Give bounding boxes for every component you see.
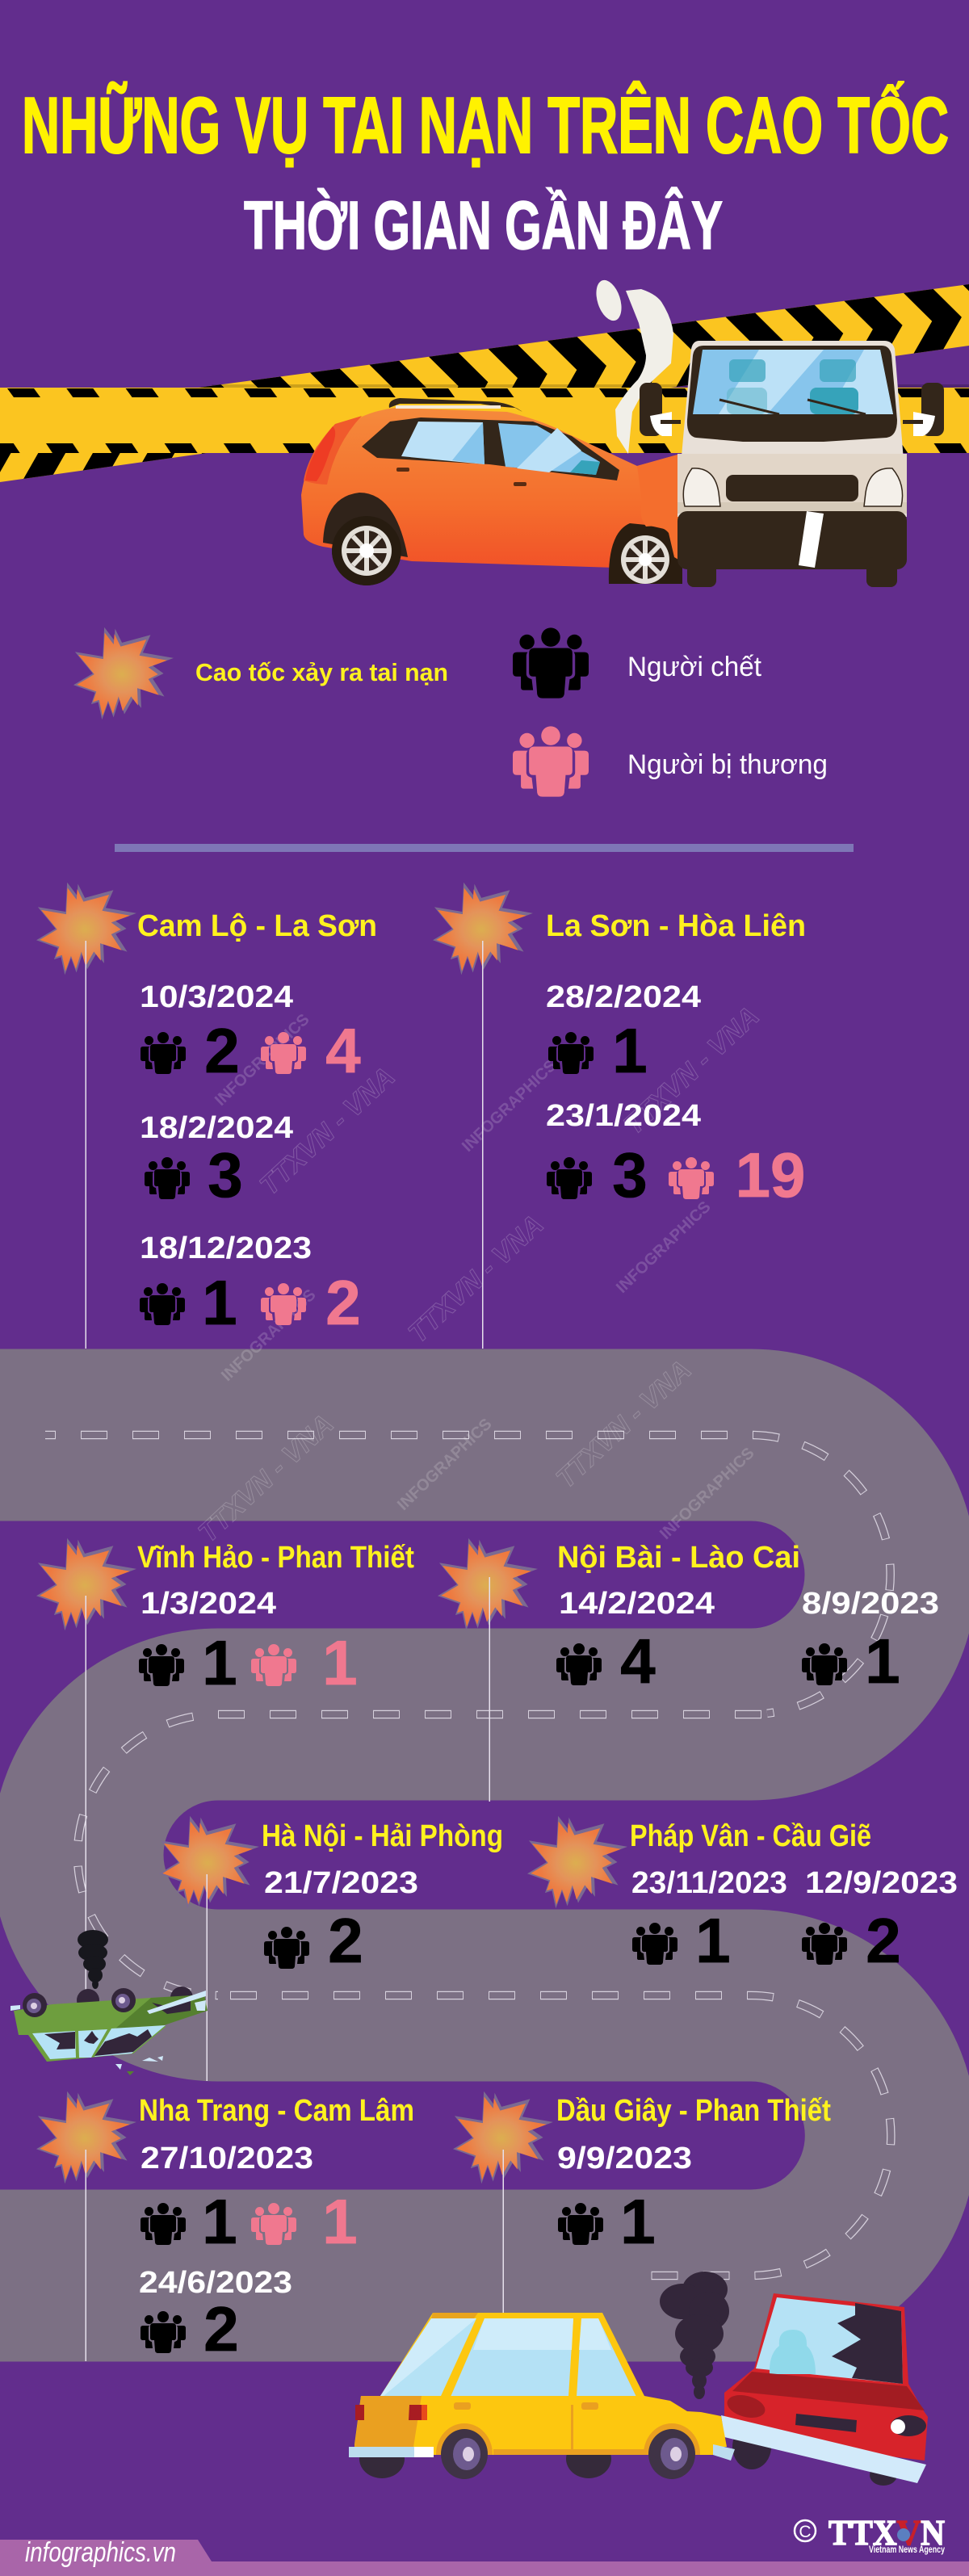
panel: Cam Lộ - La Sơn [36, 883, 377, 1349]
record: 24/6/2023: 2 [203, 2293, 239, 2364]
record: 18/2/2024: 3 [208, 1139, 243, 1210]
watermarks: INFOGRAPHICS [459, 1057, 560, 1156]
heading: Pháp Vân - Cầu Giẽ: Pháp Vân - Cầu Giẽ [630, 1819, 871, 1853]
record: 1/3/2024: 1/3/2024 [141, 1587, 276, 1621]
icon: black smoke [78, 1930, 108, 1989]
logo: TTXVN: C [799, 2523, 812, 2541]
record: 10/3/2024: 2 [204, 1015, 240, 1086]
footer source text: infographics.vn [25, 2537, 176, 2568]
record: 21/7/2023: 2 [328, 1905, 363, 1976]
record: 9/9/2023: 9/9/2023 [557, 2142, 692, 2175]
record: 12/9/2023: 12/9/2023 [805, 1866, 958, 1900]
watermarks: INFOGRAPHICS [218, 1286, 320, 1385]
record: 14/2/2024: 4 [620, 1626, 656, 1697]
winding road [0, 1435, 891, 2276]
record: 1/3/2024 [139, 1587, 358, 1698]
heading: Nha Trang - Cam Lâm: Nha Trang - Cam Lâm [139, 2094, 414, 2128]
record: 28/2/2024: 28/2/2024 [546, 980, 701, 1014]
heading: Hà Nội - Hải Phòng: Hà Nội - Hải Phòng [262, 1819, 503, 1853]
record: 24/6/2023: 24/6/2023 [139, 2266, 292, 2300]
icon: deaths [513, 627, 589, 699]
heading: La Sơn - Hòa Liên: La Sơn - Hòa Liên [546, 909, 806, 943]
legend label: highway: Cao tốc xảy ra tai nạn [195, 658, 448, 686]
record: 10/3/2024: 10/3/2024 [140, 980, 293, 1014]
legend [73, 627, 828, 797]
record: 18/12/2023: 1 [202, 1267, 237, 1338]
record: 21/7/2023 [264, 1866, 418, 1976]
record: 27/10/2023: 27/10/2023 [141, 2142, 313, 2175]
record: 27/10/2023 [141, 2142, 358, 2257]
illustration: black smoke from collision [660, 2272, 729, 2399]
panel: Pháp Vân - Cầu Giẽ [527, 1816, 958, 1976]
panel: Nha Trang - Cam Lâm [36, 2091, 414, 2364]
record: 21/7/2023: 21/7/2023 [264, 1866, 418, 1900]
watermarks: TTXVN - VNA [550, 1354, 698, 1495]
logo: TTXVN: Vietnam News Agency [869, 2544, 945, 2555]
record: 14/2/2024: 14/2/2024 [559, 1587, 715, 1621]
panel: Vĩnh Hảo - Phan Thiết [36, 1538, 414, 2001]
watermarks: INFOGRAPHICS [613, 1198, 715, 1297]
record: 28/2/2024: 1 [612, 1015, 648, 1086]
record: 1/3/2024: 1 [322, 1627, 358, 1698]
record: 28/2/2024 [546, 980, 701, 1086]
record: 12/9/2023: 2 [866, 1905, 901, 1976]
warning tape [0, 284, 969, 482]
record: 10/3/2024: 4 [325, 1015, 361, 1086]
legend label: injured: Người bị thương [627, 749, 828, 780]
panel: La Sơn - Hòa Liên [433, 883, 806, 1349]
record: 24/6/2023 [139, 2266, 292, 2364]
watermarks: TTXVN - VNA [618, 1001, 766, 1141]
icon: explosion legend [73, 627, 174, 720]
record: 23/1/2024: 23/1/2024 [546, 1099, 701, 1133]
record: 23/1/2024: 19 [736, 1139, 805, 1210]
illustration: orange car [301, 398, 684, 585]
record: 18/12/2023 [140, 1231, 361, 1338]
record: 23/11/2023 [631, 1866, 787, 1976]
logo: TTXVN: TTXVN [828, 2513, 945, 2553]
record: 12/9/2023 [802, 1866, 958, 1976]
watermarks: TTXVN - VNA [192, 1408, 340, 1549]
record: 8/9/2023: 1 [865, 1626, 900, 1697]
legend label: deaths: Người chết [627, 652, 762, 682]
illustration: truck [640, 341, 944, 587]
record: 23/11/2023: 23/11/2023 [631, 1866, 787, 1900]
record: 27/10/2023: 1 [202, 2186, 237, 2257]
watermarks: INFOGRAPHICS [394, 1416, 496, 1514]
record: 18/12/2023: 2 [325, 1267, 361, 1338]
subtitle: THỜI GIAN GẦN ĐÂY [244, 187, 723, 263]
record: 14/2/2024 [556, 1587, 715, 1697]
record: 27/10/2023: 1 [322, 2186, 358, 2257]
record: 23/1/2024 [546, 1099, 805, 1210]
record: 18/12/2023: 18/12/2023 [140, 1231, 312, 1265]
illustration: red car [721, 2293, 928, 2486]
watermarks [192, 1001, 766, 1549]
watermarks: TTXVN - VNA [402, 1209, 550, 1349]
watermarks: INFOGRAPHICS [656, 1445, 758, 1543]
record: 23/1/2024: 3 [612, 1139, 648, 1210]
record: 18/2/2024 [140, 1111, 293, 1210]
panel: Hà Nội - Hải Phòng [159, 1816, 503, 2081]
heading: Vĩnh Hảo - Phan Thiết: Vĩnh Hảo - Phan Thiết [137, 1541, 414, 1575]
record: 1/3/2024: 1 [202, 1627, 237, 1698]
panel: Nội Bài - Lào Cai [438, 1538, 939, 1802]
watermarks: TTXVN - VNA [254, 1061, 401, 1202]
panel: Dầu Giây - Phan Thiết [453, 2091, 831, 2314]
illustration: yellow car [349, 2313, 735, 2487]
watermarks: INFOGRAPHICS [212, 1011, 313, 1110]
icon: white smoke [592, 277, 673, 454]
icon: injured [513, 726, 589, 797]
record: 9/9/2023 [557, 2142, 692, 2257]
heading: Cam Lộ - La Sơn: Cam Lộ - La Sơn [137, 909, 377, 943]
record: 9/9/2023: 1 [620, 2186, 656, 2257]
record: 23/11/2023: 1 [695, 1905, 731, 1976]
record: 10/3/2024 [140, 980, 361, 1086]
illustration: overturned green car [10, 1930, 208, 2075]
heading: Nội Bài - Lào Cai: Nội Bài - Lào Cai [557, 1541, 800, 1575]
heading: Dầu Giây - Phan Thiết: Dầu Giây - Phan Thiết [556, 2094, 831, 2128]
footer bar [0, 2537, 969, 2576]
record: 8/9/2023 [802, 1587, 939, 1697]
record: 8/9/2023: 8/9/2023 [802, 1587, 939, 1621]
record: 18/2/2024: 18/2/2024 [140, 1111, 293, 1145]
